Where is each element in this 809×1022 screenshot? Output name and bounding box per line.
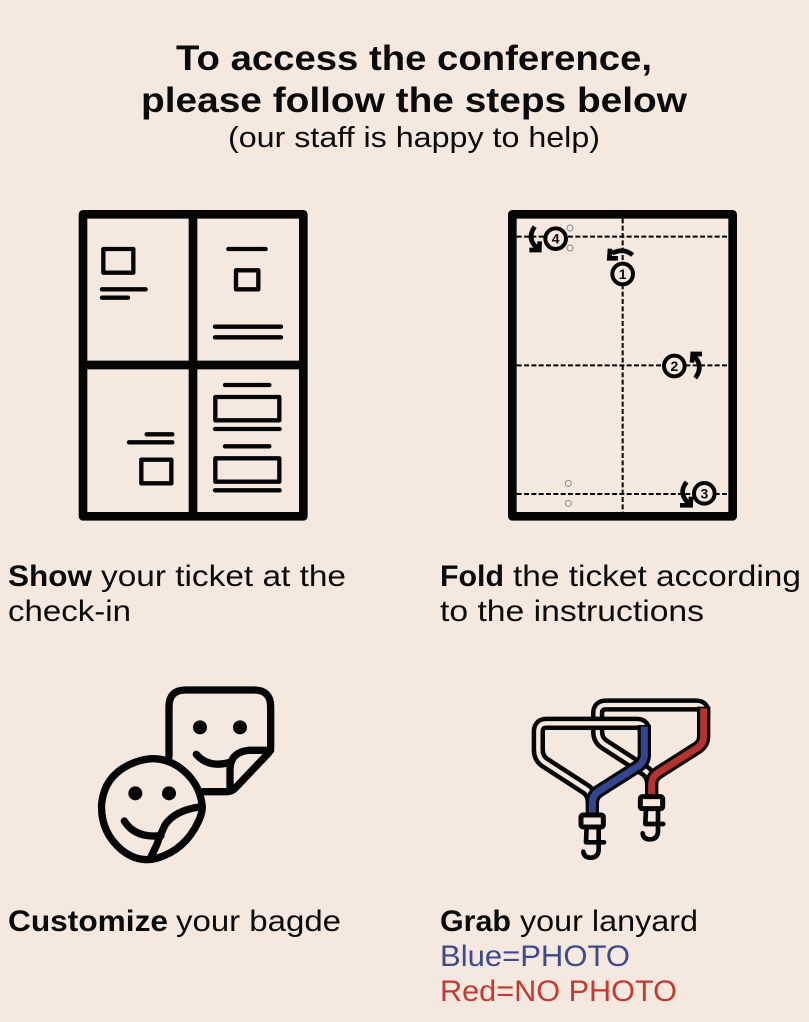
subtitle: (our staff is happy to help) bbox=[228, 122, 600, 154]
icon: ticket folding instructions: 3 bbox=[700, 485, 708, 501]
step text: fold: Fold bbox=[440, 560, 504, 593]
icon: smiley stickers bbox=[102, 690, 271, 860]
icon: ticket check-in layout bbox=[83, 214, 303, 516]
title: To access the conference, bbox=[176, 39, 652, 78]
title bbox=[141, 39, 688, 120]
step text: show bbox=[8, 560, 346, 628]
step text: customize: your bagde bbox=[176, 905, 341, 938]
step text: grab lanyard bbox=[440, 905, 698, 1008]
fold lines bbox=[517, 218, 729, 512]
step text: grab lanyard: Blue=PHOTO bbox=[440, 940, 630, 973]
step text: fold: the ticket according bbox=[513, 560, 801, 593]
blue lanyard bbox=[538, 723, 644, 858]
icon: ticket folding instructions: 1 bbox=[619, 266, 627, 282]
step text: grab lanyard: your lanyard bbox=[520, 905, 698, 938]
step text: fold: to the instructions bbox=[440, 595, 704, 628]
red lanyard bbox=[598, 705, 704, 839]
step text: show: check-in bbox=[8, 595, 131, 628]
step text: fold bbox=[440, 560, 801, 628]
step text: customize: Customize bbox=[8, 905, 168, 938]
step text: show: Show bbox=[8, 560, 93, 593]
step text: grab lanyard: Grab bbox=[440, 905, 511, 938]
step text: show: your ticket at the bbox=[101, 560, 346, 593]
step text: grab lanyard: Red=NO PHOTO bbox=[440, 975, 677, 1008]
step text: customize bbox=[8, 905, 341, 938]
title: please follow the steps below bbox=[141, 81, 688, 120]
icon: ticket folding instructions bbox=[512, 214, 733, 516]
icon: ticket folding instructions: 4 bbox=[552, 231, 560, 247]
icon: ticket folding instructions: 2 bbox=[670, 358, 678, 374]
icon: lanyards bbox=[538, 705, 704, 858]
